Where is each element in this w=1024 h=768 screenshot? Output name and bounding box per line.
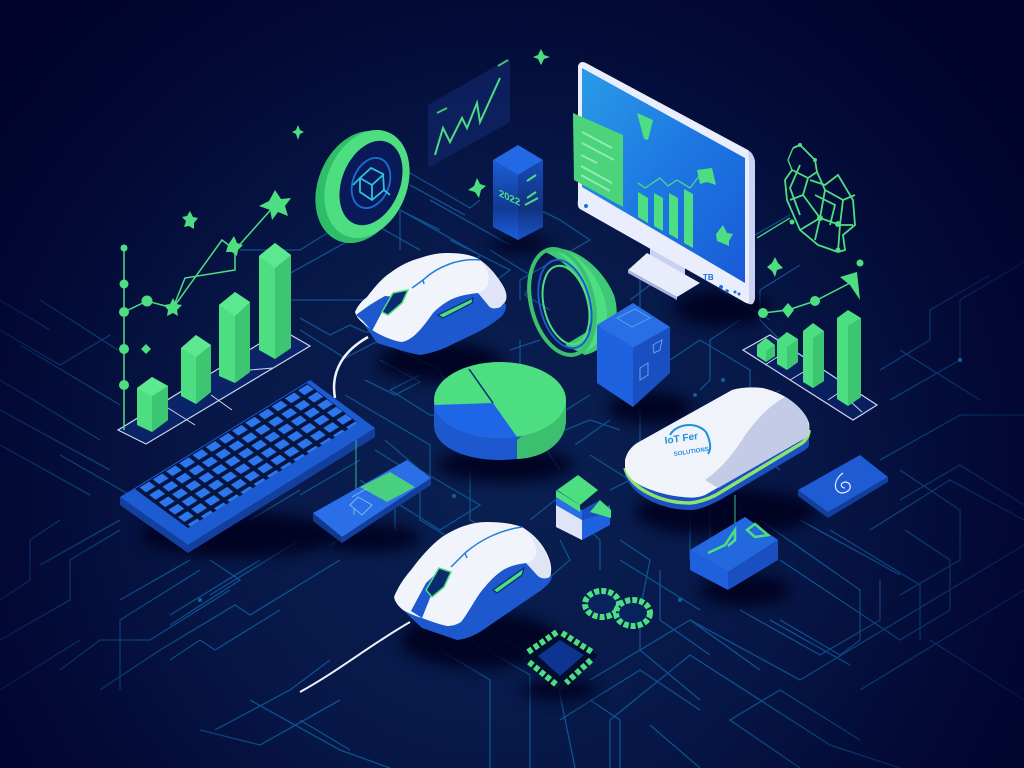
- blue slice: [434, 403, 517, 438]
- phone glyph: [350, 488, 372, 515]
- cube top detail: [617, 309, 650, 327]
- screen chart bars: [638, 189, 693, 248]
- green ring: [519, 242, 617, 362]
- bar 4: [259, 243, 291, 359]
- sparkle stars: [468, 49, 783, 277]
- right bar chart: [743, 260, 877, 420]
- mouse base: [403, 540, 552, 640]
- chip: [522, 630, 598, 692]
- green network mesh: [757, 143, 855, 252]
- bar 1: [757, 338, 775, 362]
- circuit nodes: [198, 238, 962, 602]
- bar 3: [803, 323, 824, 388]
- base plate: [743, 335, 877, 420]
- line dots and stars: [141, 125, 304, 354]
- mouse shell: [625, 387, 809, 498]
- mouse logo: [664, 425, 710, 458]
- center line: [451, 527, 522, 567]
- icon: green ring badge: [299, 117, 425, 257]
- green panel: [573, 113, 623, 207]
- small green and white block: [556, 475, 611, 540]
- blue box: [690, 517, 778, 590]
- key well: [135, 383, 358, 528]
- box glyphs: [708, 524, 768, 553]
- scroll wheel: [426, 568, 451, 597]
- keycaps: [135, 383, 358, 528]
- trend lines: [124, 205, 275, 312]
- upper mouse: [355, 253, 506, 355]
- mouse logo: IoT Fer: [664, 431, 699, 447]
- bezel: [578, 62, 755, 304]
- flat white mouse: [625, 387, 809, 510]
- bar 2: [181, 335, 211, 404]
- monitor: [573, 62, 755, 304]
- screen stars: [637, 113, 733, 246]
- mouse base: [363, 280, 506, 355]
- trend line: [758, 260, 864, 318]
- shell shading: [478, 260, 506, 308]
- left bar chart: [118, 125, 310, 444]
- shadows: [140, 237, 815, 700]
- mouse logo: SOLUTIONS: [674, 447, 709, 458]
- side button: [438, 298, 473, 318]
- slice gap: [469, 369, 493, 403]
- circuit traces: [0, 170, 1024, 768]
- screen trend line: [638, 175, 700, 188]
- circuit emblem: [345, 152, 397, 214]
- chart panel top: [428, 58, 510, 168]
- screen: [582, 68, 745, 283]
- chin details: [584, 204, 740, 296]
- cable: lower mouse: [300, 622, 410, 692]
- blue tile: [798, 455, 888, 518]
- gears: [585, 591, 650, 626]
- center line: [412, 260, 480, 288]
- shell shading: [705, 397, 809, 488]
- mouse shell: [394, 522, 551, 626]
- blue cube: [597, 303, 670, 407]
- keyboard: [120, 380, 375, 553]
- green edge stripe: [625, 430, 809, 503]
- small phone device: [313, 460, 431, 543]
- keyboard side: [120, 428, 375, 553]
- shell shading: [525, 530, 551, 578]
- mouse shell: [355, 253, 506, 342]
- axis with dots: [119, 244, 129, 430]
- stand: [650, 240, 685, 278]
- keyboard top: [120, 380, 375, 545]
- bar 3: [219, 292, 250, 383]
- green link lines: [356, 440, 735, 525]
- mouse base: [625, 423, 809, 510]
- bar 4: [837, 310, 861, 406]
- nose stripe: [356, 296, 397, 331]
- bar 1: [137, 377, 168, 432]
- green patch: [360, 472, 415, 502]
- pie chart: [434, 362, 566, 460]
- scroll wheel: [382, 290, 408, 315]
- server tower: [493, 145, 543, 240]
- chart line: [435, 78, 500, 155]
- base plate: [118, 330, 310, 444]
- tile icon: [835, 473, 850, 493]
- side button: [493, 568, 524, 593]
- chin details: TB: [703, 273, 714, 282]
- lower mouse: [394, 522, 552, 640]
- bar 2: [777, 332, 798, 370]
- tower label: 2022: [499, 188, 520, 209]
- cable: upper mouse: [334, 337, 368, 398]
- nose stripe: [411, 570, 447, 618]
